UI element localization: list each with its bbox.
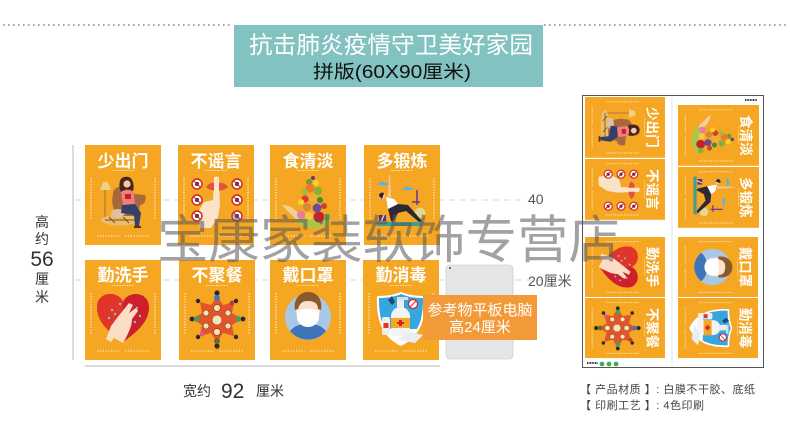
height guides: 20厘米 — [528, 273, 572, 289]
poster: 勤消毒: 勤消毒 — [376, 265, 426, 285]
poster: 勤洗手: 勤洗手 — [98, 265, 148, 285]
sheet panel: 少出门: 少出门 — [644, 107, 660, 148]
title banner: 拼版(60X90厘米) — [313, 62, 471, 82]
height label: 厘 — [35, 271, 49, 287]
sheet panel: 戴口罩: 戴口罩 — [737, 247, 753, 287]
watermark: 宝康家装软饰专营店 — [157, 211, 620, 269]
height label — [30, 214, 54, 305]
width label: 厘米 — [256, 383, 284, 399]
poster: 不聚餐 — [179, 260, 255, 360]
sheet panel: 食清淡 — [678, 105, 759, 166]
layout sheet — [582, 96, 764, 368]
poster: 戴口罩: 戴口罩 — [282, 265, 334, 285]
dimension lines — [73, 145, 440, 366]
poster: 勤消毒 — [363, 260, 439, 360]
sheet panel: 多锻炼 — [678, 167, 759, 228]
sheet panel: 勤洗手: 勤洗手 — [644, 247, 660, 287]
sheet panel: 不聚餐: 不聚餐 — [644, 308, 660, 349]
poster: 勤洗手 — [85, 260, 161, 360]
poster: 戴口罩 — [270, 260, 346, 360]
sheet registration marks — [587, 362, 618, 366]
product specs — [580, 382, 755, 412]
title banner — [234, 25, 543, 87]
sheet panel: 多锻炼: 多锻炼 — [738, 177, 754, 218]
poster: 食清淡 — [270, 145, 346, 245]
sheet panel: 勤消毒 — [678, 298, 758, 358]
height label: 高 — [35, 214, 49, 230]
sheet panel: 不谣言 — [585, 159, 665, 220]
sheet panel: 食清淡: 食清淡 — [738, 115, 754, 156]
height label: 56 — [30, 248, 54, 271]
callout: tablet reference: 参考物平板电脑 — [427, 301, 533, 319]
width label: 92 — [221, 380, 244, 403]
sheet panel: 少出门 — [585, 97, 665, 158]
sheet panel: 不聚餐 — [585, 298, 665, 358]
sheet panel: 戴口罩 — [678, 237, 758, 297]
callout: tablet reference — [423, 295, 537, 340]
width label: 宽约 — [183, 383, 211, 399]
reference tablet — [446, 265, 513, 359]
sheet panel: 不谣言: 不谣言 — [644, 169, 660, 210]
poster: 不聚餐: 不聚餐 — [192, 266, 242, 285]
dotted rule — [3, 24, 788, 26]
height label: 约 — [35, 231, 49, 247]
poster: 食清淡: 食清淡 — [282, 151, 334, 171]
sheet panel: 勤消毒: 勤消毒 — [737, 308, 753, 349]
callout: tablet reference: 高24厘米 — [449, 319, 511, 336]
poster: 多锻炼: 多锻炼 — [376, 151, 428, 171]
product specs: 【 印刷工艺 】: 4色印刷 — [580, 398, 704, 412]
width label — [183, 380, 284, 403]
sheet panel: 勤洗手 — [585, 237, 665, 297]
poster: 不谣言 — [178, 145, 254, 245]
poster: 少出门: 少出门 — [98, 152, 148, 171]
height guides: 40 — [528, 191, 544, 207]
poster: 少出门 — [85, 145, 161, 245]
height label: 米 — [35, 289, 49, 305]
product specs: 【 产品材质 】: 白膜不干胶、底纸 — [580, 382, 755, 396]
poster: 不谣言: 不谣言 — [190, 151, 242, 171]
title banner: 抗击肺炎疫情守卫美好家园 — [249, 32, 533, 58]
poster: 多锻炼 — [364, 145, 440, 245]
height guides — [75, 191, 572, 289]
